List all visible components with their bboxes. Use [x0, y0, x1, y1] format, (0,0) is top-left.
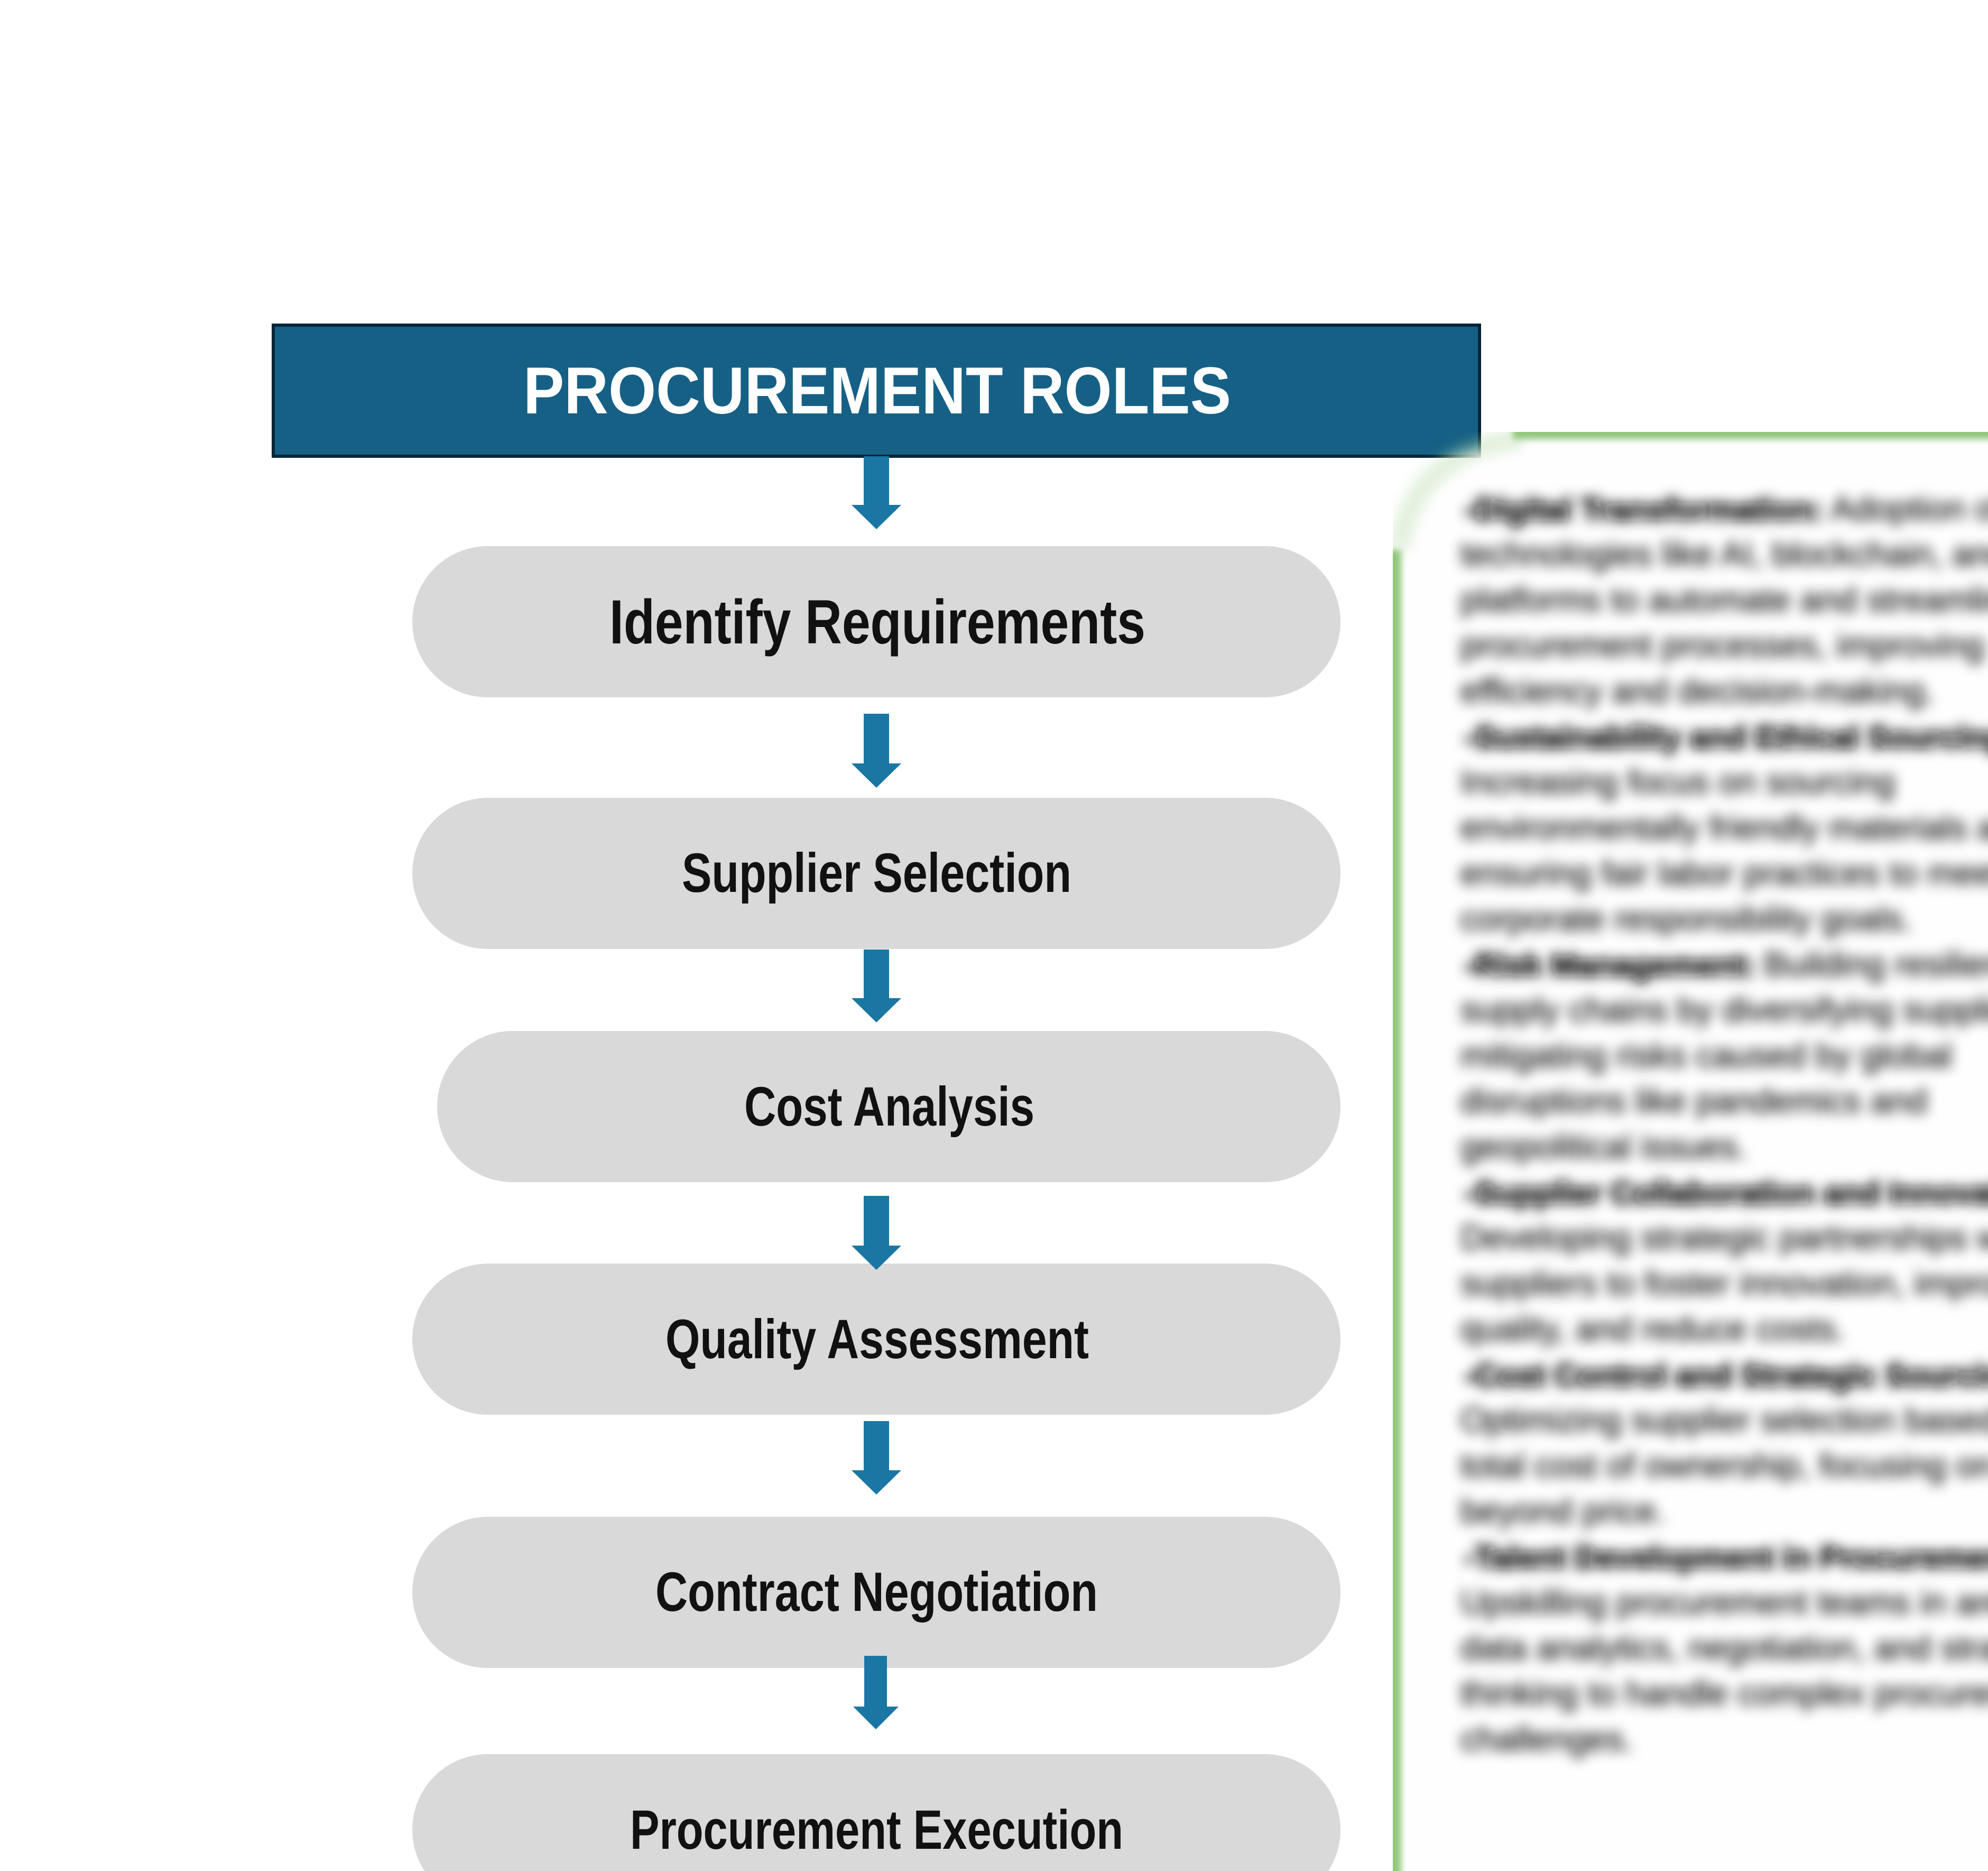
text block: blurred trends list: mitigating risks caused by global [1460, 1036, 1952, 1074]
text block: blurred trends list [1460, 490, 1988, 1758]
panel: procurement roles header [273, 325, 1480, 456]
arrow: cost analysis to quality assessment [852, 1196, 901, 1270]
arrow: supplier selection to cost analysis [852, 950, 901, 1022]
text block: blurred trends list: disruptions like pandemics and [1460, 1082, 1927, 1120]
text block: blurred trends list: corporate responsibility goals. [1460, 900, 1912, 938]
text block: blurred trends list: geopolitical issues. [1460, 1128, 1747, 1166]
text block: blurred trends list: beyond price. [1460, 1492, 1666, 1530]
step: supplier selection: Supplier Selection [682, 842, 1071, 904]
step: quality assessment: Quality Assessment [665, 1308, 1089, 1370]
step: procurement execution [412, 1754, 1340, 1871]
step: identify requirements [412, 546, 1340, 697]
text block: blurred trends list: quality, and reduce costs. [1460, 1310, 1845, 1348]
arrow: quality assessment to contract negotiation [852, 1421, 901, 1495]
step: quality assessment [412, 1264, 1340, 1415]
step: contract negotiation [412, 1517, 1340, 1668]
arrow: contract negotiation to procurement execution [853, 1656, 899, 1729]
text block: blurred trends list: challenges. [1460, 1720, 1633, 1758]
text block: blurred trends list: Increasing focus on sourcing [1460, 763, 1895, 801]
panel: procurement trends (blurred) [1393, 432, 1988, 1871]
step: cost analysis: Cost Analysis [744, 1076, 1034, 1138]
text block: blurred trends list: efficiency and decision-making. [1460, 672, 1934, 710]
step: procurement execution: Procurement Execution [630, 1799, 1123, 1861]
arrow: identify requirements to supplier selection [852, 714, 901, 788]
text block: blurred trends list: procurement processes, improving [1460, 626, 1984, 665]
title: PROCUREMENT ROLES [523, 354, 1231, 428]
step: contract negotiation: Contract Negotiation [655, 1561, 1098, 1623]
step: identify requirements: Identify Requirements [609, 587, 1145, 657]
arrow: header to identify requirements [852, 456, 901, 529]
text block: blurred trends list: ensuring fair labor practices to meet [1460, 854, 1988, 892]
text block: blurred trends list: -Digital Transformation: Adoption of [1464, 490, 1988, 528]
step: cost analysis [437, 1031, 1340, 1182]
step: supplier selection [412, 798, 1340, 949]
